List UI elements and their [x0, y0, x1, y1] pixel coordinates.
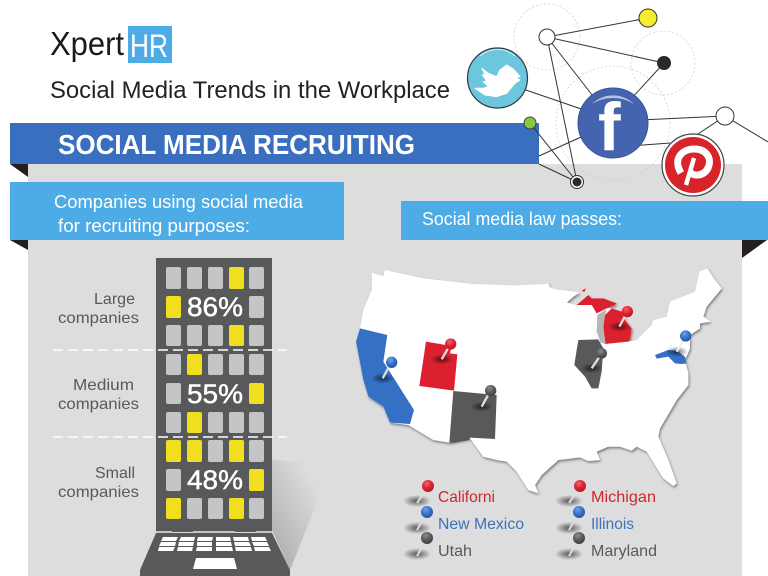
- legend: Michigan: [555, 480, 656, 507]
- banner: social media recruiting: SOCIAL MEDIA RECRUITING: [58, 129, 415, 160]
- icon: laptop base: [140, 532, 290, 576]
- map outline: [356, 268, 722, 493]
- subtitle: Social Media Trends in the Workplace: [50, 77, 450, 104]
- state: Utah: [419, 342, 457, 391]
- panel: grey background: [28, 164, 742, 576]
- node: yellow: [639, 9, 657, 27]
- label: medium companies: [58, 377, 139, 413]
- legend: Illinois: Illinois: [591, 516, 634, 533]
- pin: Maryland: [665, 330, 691, 357]
- node: white top: [539, 29, 555, 45]
- logo: XpertHR: Xpert: [50, 25, 124, 62]
- legend: Utah: [403, 532, 472, 560]
- header: companies using social media: [10, 182, 344, 250]
- value: large 86%: 86%: [187, 292, 243, 322]
- pin: Illinois: [580, 348, 607, 374]
- value: medium 55%: 55%: [187, 379, 243, 409]
- legend: California: [403, 480, 495, 507]
- pin: California: [371, 357, 397, 384]
- lake Michigan: [597, 309, 607, 344]
- logo: XpertHR: [50, 25, 172, 64]
- node: ringed black: [570, 176, 584, 188]
- label: small companies: companies: [58, 484, 139, 501]
- state: California: [356, 328, 414, 424]
- header: social media law passes: [401, 201, 768, 258]
- node: black: [657, 56, 671, 70]
- icon: pinterest: [662, 134, 724, 196]
- logo: XpertHR: HR: [130, 28, 168, 64]
- value: small 48%: 48%: [187, 465, 243, 495]
- map: United States: [356, 268, 722, 493]
- pin: New Mexico: [470, 385, 496, 412]
- chart: office tower with company sizes: [156, 258, 272, 532]
- label: medium companies: Medium: [73, 377, 134, 394]
- label: large companies: companies: [58, 310, 139, 327]
- header: companies using social media: Companies using social media: [54, 192, 304, 212]
- state: Michigan: [577, 288, 632, 344]
- legend: New Mexico: New Mexico: [438, 516, 524, 533]
- header: social media law passes: Social media law passes:: [422, 209, 622, 229]
- legend: Illinois: [555, 506, 634, 534]
- legend: Michigan: Michigan: [591, 489, 656, 506]
- pin: Utah: [430, 338, 456, 365]
- label: medium companies: companies: [58, 396, 139, 413]
- banner: social media recruiting: [10, 123, 539, 177]
- pin: Michigan: [608, 306, 633, 332]
- legend: New Mexico: [403, 506, 524, 534]
- icon: facebook: [578, 88, 648, 165]
- label: large companies: [58, 291, 139, 327]
- icon: twitter: [468, 48, 528, 108]
- network lines and nodes: [514, 4, 768, 188]
- node: green: [524, 117, 536, 129]
- icon: laptop shadow: [272, 460, 333, 570]
- legend: [403, 480, 657, 560]
- state: New Mexico: [449, 391, 497, 443]
- label: small companies: Small: [95, 465, 135, 482]
- label: small companies: [58, 465, 139, 501]
- state: Maryland: [655, 350, 687, 364]
- label: large companies: Large: [94, 291, 135, 308]
- legend: Maryland: Maryland: [591, 543, 657, 560]
- header: companies using social media: for recruiting purposes:: [58, 216, 250, 236]
- legend: California: Californi: [438, 489, 495, 506]
- icon: facebook: f: [598, 89, 621, 165]
- node: white right: [716, 107, 734, 125]
- legend: Utah: Utah: [438, 543, 472, 560]
- legend: Maryland: [555, 532, 657, 560]
- state: Illinois: [574, 339, 603, 388]
